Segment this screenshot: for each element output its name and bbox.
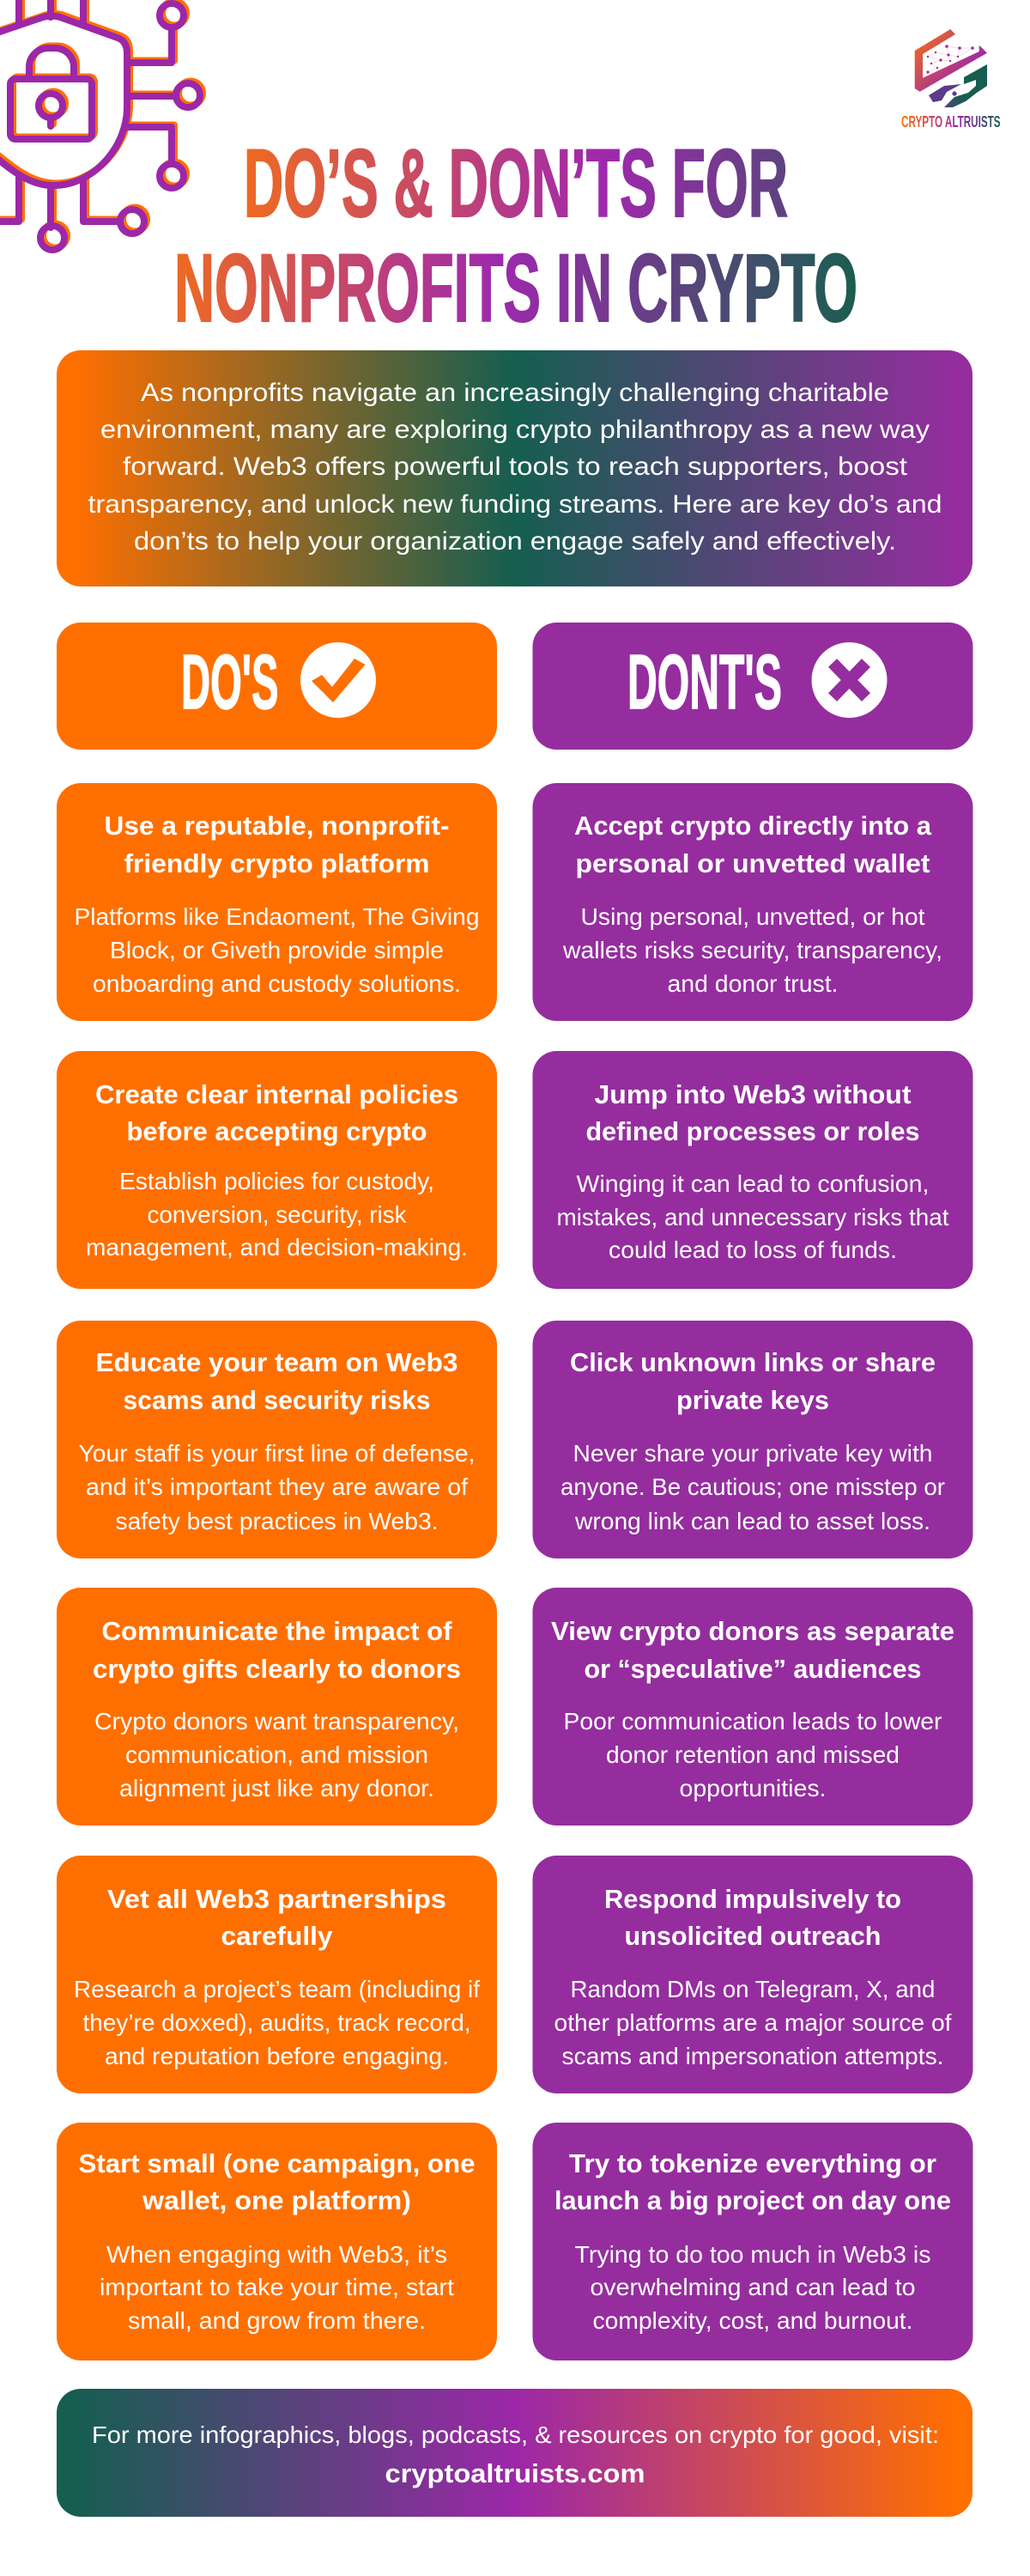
card heading (554, 2148, 951, 2215)
card body (74, 903, 479, 997)
card heading: Create clear internal policies (95, 1079, 458, 1109)
card body: mistakes, and unnecessary risks that (556, 1204, 949, 1230)
card body: Winging it can lead to confusion, (577, 1170, 929, 1197)
icon: shield with padlock and circuit nodes (0, 0, 203, 250)
card body: they’re doxxed), audits, track record, (82, 2009, 470, 2036)
card body: When engaging with Web3, it’s (106, 2241, 447, 2268)
panel: do card 4 (57, 1588, 497, 1826)
card body: safety best practices in Web3. (115, 1508, 439, 1534)
panel: do card 5 (57, 1856, 497, 2093)
footer link: cryptoaltruists.com (385, 2458, 645, 2488)
card body: Your staff is your first line of defense, (79, 1440, 476, 1467)
card body: Block, or Giveth provide simple (110, 937, 444, 963)
card heading (551, 1616, 954, 1684)
card heading: private keys (676, 1385, 829, 1415)
panel: Do's header (57, 623, 497, 750)
card body (556, 1170, 949, 1263)
card body: onboarding and custody solutions. (93, 970, 461, 997)
card body: opportunities. (680, 1775, 826, 1801)
card body: conversion, security, risk (148, 1201, 407, 1228)
card body (554, 1976, 952, 2069)
card heading (95, 1079, 458, 1146)
card heading: Click unknown links or share (570, 1347, 936, 1377)
card heading: Jump into Web3 without (594, 1079, 912, 1109)
card body: other platforms are a major source of (554, 2009, 952, 2036)
card heading: Accept crypto directly into a (574, 811, 932, 841)
intro text: don’ts to help your organization engage safely and effectively. (134, 527, 896, 556)
panel: don't card 3 (532, 1321, 973, 1558)
card body (86, 1168, 468, 1261)
logo mark: laptop frame (915, 29, 987, 92)
card heading: defined processes or roles (585, 1116, 920, 1146)
panel: don't card 1 (532, 783, 973, 1021)
panel: don't card 2 (532, 1051, 973, 1289)
panel: don't card 5 (532, 1856, 973, 2093)
panel: do card 6 (57, 2123, 497, 2360)
card body: and it’s important they are aware of (86, 1473, 468, 1500)
intro text (88, 379, 942, 556)
intro text: As nonprofits navigate an increasingly challenging charitable (141, 379, 889, 407)
card heading: crypto gifts clearly to donors (93, 1654, 461, 1684)
heading: Don'ts: DONT'S (627, 640, 782, 726)
card body: communication, and mission (125, 1741, 428, 1768)
card body: Never share your private key with (573, 1440, 932, 1467)
card heading (585, 1079, 920, 1146)
card body: Random DMs on Telegram, X, and (570, 1976, 936, 2002)
card body: anyone. Be cautious; one misstep or (560, 1473, 945, 1500)
card heading (107, 1884, 446, 1951)
panel: introduction (57, 350, 972, 586)
card heading: Communicate the impact of (101, 1616, 452, 1646)
panel: footer call to action (57, 2389, 972, 2517)
intro text: forward. Web3 offers powerful tools to reach supporters, boost (123, 453, 908, 481)
card heading: Start small (one campaign, one (79, 2148, 476, 2178)
panel: do card 3 (57, 1321, 497, 1558)
card body: and donor trust. (668, 970, 838, 997)
card body: management, and decision-making. (86, 1234, 468, 1261)
card heading (93, 1616, 461, 1684)
card body (562, 903, 942, 997)
panel: do card 1 (57, 783, 497, 1021)
card body: Platforms like Endaoment, The Giving (74, 903, 479, 930)
card body: could lead to loss of funds. (609, 1236, 897, 1263)
card heading (79, 2148, 476, 2215)
card heading: wallet, one platform) (142, 2185, 411, 2215)
footer text: For more infographics, blogs, podcasts, & resources on crypto for good, visit: (92, 2421, 939, 2448)
card body (74, 1976, 480, 2069)
card heading (570, 1347, 936, 1415)
card heading: or “speculative” audiences (584, 1654, 922, 1684)
icon: cross in circle (812, 642, 888, 718)
card heading (105, 811, 450, 878)
card heading: scams and security risks (124, 1385, 431, 1415)
card body (560, 1440, 945, 1534)
card body: Poor communication leads to lower (563, 1708, 942, 1735)
card heading: launch a big project on day one (554, 2185, 951, 2215)
panel: Don'ts header (532, 623, 973, 750)
card body: and reputation before engaging. (105, 2043, 449, 2069)
card body (100, 2241, 454, 2334)
card body: scams and impersonation attempts. (561, 2043, 944, 2069)
panel: do card 2 (57, 1051, 497, 1289)
card heading: Respond impulsively to (604, 1884, 901, 1914)
intro text: transparency, and unlock new funding streams. Here are key do’s and (88, 490, 942, 519)
card heading: friendly crypto platform (124, 848, 429, 878)
card heading: unsolicited outreach (625, 1921, 881, 1951)
icon: check mark in circle (300, 642, 376, 718)
card heading: Use a reputable, nonprofit- (105, 811, 450, 841)
intro text: environment, many are exploring crypto philanthropy as a new way (100, 416, 930, 444)
card heading: before accepting crypto (127, 1116, 427, 1146)
heading: Do's: DO'S (181, 640, 278, 726)
card body: Trying to do too much in Web3 is (575, 2241, 930, 2268)
card heading (96, 1347, 458, 1415)
card body (563, 1708, 942, 1801)
card body: overwhelming and can lead to (591, 2274, 915, 2300)
card body: important to take your time, start (100, 2274, 454, 2300)
card body: small, and grow from there. (128, 2307, 426, 2334)
card body: Establish policies for custody, (119, 1168, 434, 1194)
logo: Crypto Altruists (901, 29, 1001, 131)
logo mark: network dots (926, 45, 974, 74)
card heading: carefully (221, 1921, 333, 1951)
card body: donor retention and missed (606, 1741, 900, 1768)
panel: don't card 4 (532, 1588, 973, 1826)
card body: Using personal, unvetted, or hot (580, 903, 925, 930)
card body: Crypto donors want transparency, (94, 1708, 459, 1735)
card heading: Try to tokenize everything or (569, 2148, 936, 2178)
card heading: Vet all Web3 partnerships (107, 1884, 446, 1914)
card body: complexity, cost, and burnout. (592, 2307, 913, 2334)
card body: wrong link can lead to asset loss. (574, 1508, 930, 1534)
card body: wallets risks security, transparency, (562, 937, 942, 963)
card heading (574, 811, 932, 878)
title (174, 130, 857, 342)
card body (79, 1440, 476, 1534)
panel: don't card 6 (532, 2123, 973, 2360)
card body (575, 2241, 930, 2334)
logo mark: giving hands (929, 64, 987, 107)
card body: alignment just like any donor. (119, 1775, 434, 1801)
card heading: View crypto donors as separate (551, 1616, 954, 1646)
card heading: Educate your team on Web3 (96, 1347, 458, 1377)
card body: Research a project’s team (including if (74, 1976, 480, 2002)
card heading (604, 1884, 901, 1951)
card heading: personal or unvetted wallet (575, 848, 930, 878)
card body (94, 1708, 459, 1801)
